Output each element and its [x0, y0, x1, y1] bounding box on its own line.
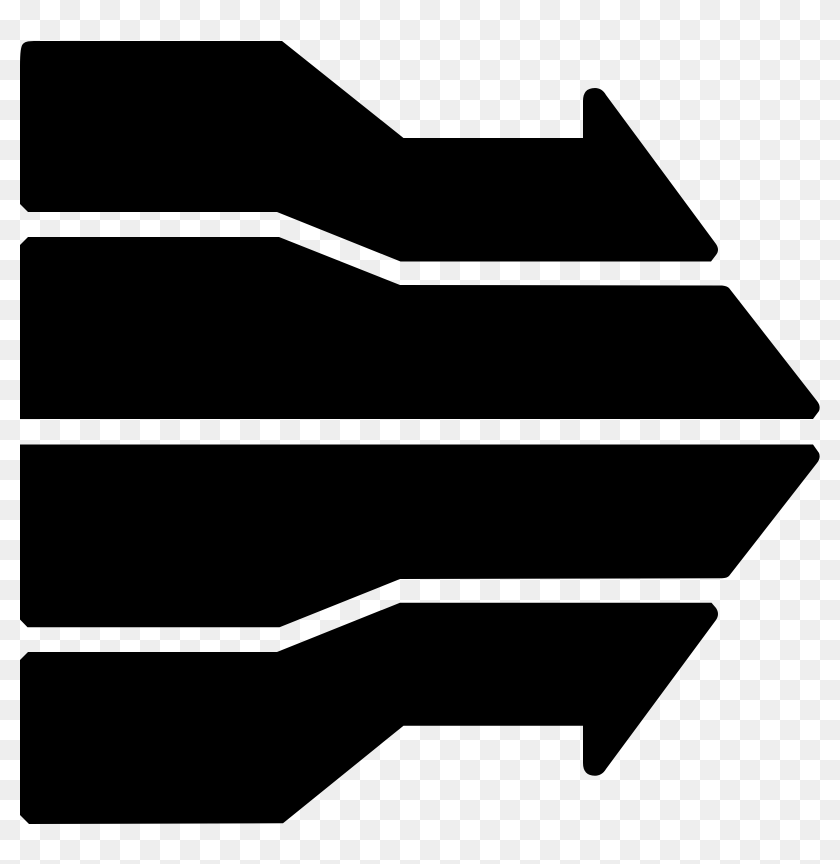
arrow: bottom band with arrowhead — [20, 603, 718, 824]
arrow: top band with arrowhead — [20, 41, 718, 262]
arrow: upper middle band — [20, 237, 820, 419]
arrow: lower middle band — [20, 444, 820, 627]
